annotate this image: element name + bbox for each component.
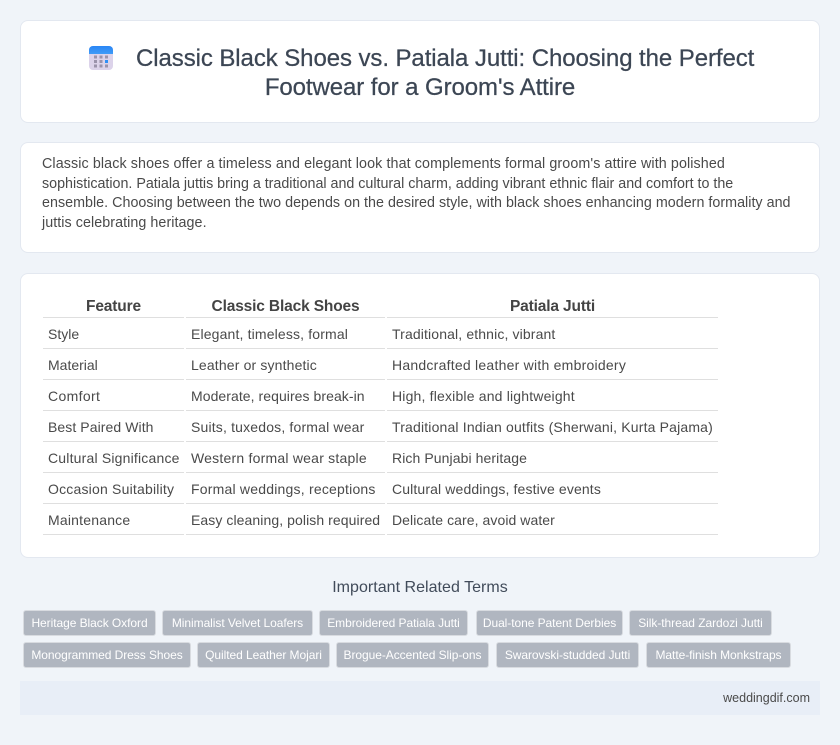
row: best paired with	[48, 419, 713, 435]
comparison table	[43, 298, 718, 535]
row: maintenance	[48, 512, 555, 528]
tag: Minimalist Velvet Loafers	[172, 616, 303, 630]
row: occasion suitability: Cultural weddings, festive events	[392, 481, 601, 497]
tag: Heritage Black Oxford	[31, 616, 148, 630]
table header: Feature	[86, 298, 141, 315]
related terms tags	[23, 610, 791, 668]
row: material: Handcrafted leather with embroidery	[392, 357, 626, 373]
row: comfort	[48, 388, 575, 404]
row: comfort: Moderate, requires break-in	[191, 388, 365, 404]
icon: calendar	[89, 46, 113, 70]
tag	[23, 610, 156, 636]
row: style: Traditional, ethnic, vibrant	[392, 326, 555, 342]
footer bar	[20, 681, 820, 715]
row: best paired with: Best Paired With	[48, 419, 154, 435]
text block: introduction	[42, 156, 791, 230]
row: comfort: High, flexible and lightweight	[392, 388, 575, 404]
tag	[629, 610, 772, 636]
row: maintenance: Easy cleaning, polish required	[191, 512, 380, 528]
row: cultural significance	[48, 450, 527, 466]
row: best paired with: Suits, tuxedos, formal wear	[191, 419, 364, 435]
tag	[162, 610, 313, 636]
row: style: Style	[48, 326, 79, 342]
tag: Brogue-Accented Slip-ons	[344, 648, 481, 662]
tag	[23, 642, 191, 668]
panel: comparison table	[20, 273, 820, 558]
tag	[496, 642, 639, 668]
row: comfort: Comfort	[48, 388, 100, 404]
row: cultural significance: Cultural Significance	[48, 450, 180, 466]
row: material: Material	[48, 357, 98, 373]
tag: Embroidered Patiala Jutti	[327, 616, 460, 630]
text block: introduction: Classic black shoes offer a timeless and elegant look that complements formal groom's attire with polished	[42, 156, 725, 172]
title	[136, 45, 754, 101]
title: Footwear for a Groom's Attire	[265, 74, 575, 101]
title: Classic Black Shoes vs. Patiala Jutti: Choosing the Perfect	[136, 45, 754, 72]
tag	[646, 642, 791, 668]
row: style: Elegant, timeless, formal	[191, 326, 348, 342]
row: occasion suitability: Formal weddings, receptions	[191, 481, 376, 497]
row: style	[48, 326, 556, 342]
heading: related terms: Important Related Terms	[332, 579, 508, 596]
row: best paired with: Traditional Indian outfits (Sherwani, Kurta Pajama)	[392, 419, 713, 435]
tag: Swarovski-studded Jutti	[505, 648, 630, 662]
tag	[197, 642, 330, 668]
table header: Classic Black Shoes	[212, 298, 359, 315]
row: material	[48, 357, 626, 373]
footer credit: weddingdif.com	[723, 691, 810, 705]
tag: Quilted Leather Mojari	[205, 648, 322, 662]
tag: Matte-finish Monkstraps	[656, 648, 782, 662]
text block: introduction: sophistication. Patiala juttis bring a traditional and cultural charm, adding vibrant ethnic flair and comfort to the	[42, 176, 733, 192]
tag	[476, 610, 623, 636]
text block: introduction: ensemble. Choosing between the two depends on the desired style, with black shoes enhancing modern formality and	[42, 195, 791, 211]
text block: introduction: juttis celebrating heritage.	[42, 214, 207, 230]
row: material: Leather or synthetic	[191, 357, 317, 373]
row: maintenance: Delicate care, avoid water	[392, 512, 555, 528]
row: cultural significance: Rich Punjabi heritage	[392, 450, 527, 466]
row: occasion suitability: Occasion Suitability	[48, 481, 174, 497]
tag	[336, 642, 489, 668]
table header	[86, 298, 595, 315]
row: cultural significance: Western formal wear staple	[191, 450, 367, 466]
row: occasion suitability	[48, 481, 601, 497]
tag	[319, 610, 468, 636]
tag: Dual-tone Patent Derbies	[483, 616, 616, 630]
tag: Monogrammed Dress Shoes	[31, 648, 183, 662]
table header: Patiala Jutti	[510, 298, 595, 315]
tag: Silk-thread Zardozi Jutti	[638, 616, 763, 630]
panel: introduction	[20, 142, 820, 253]
panel: header	[20, 20, 820, 123]
row: maintenance: Maintenance	[48, 512, 130, 528]
